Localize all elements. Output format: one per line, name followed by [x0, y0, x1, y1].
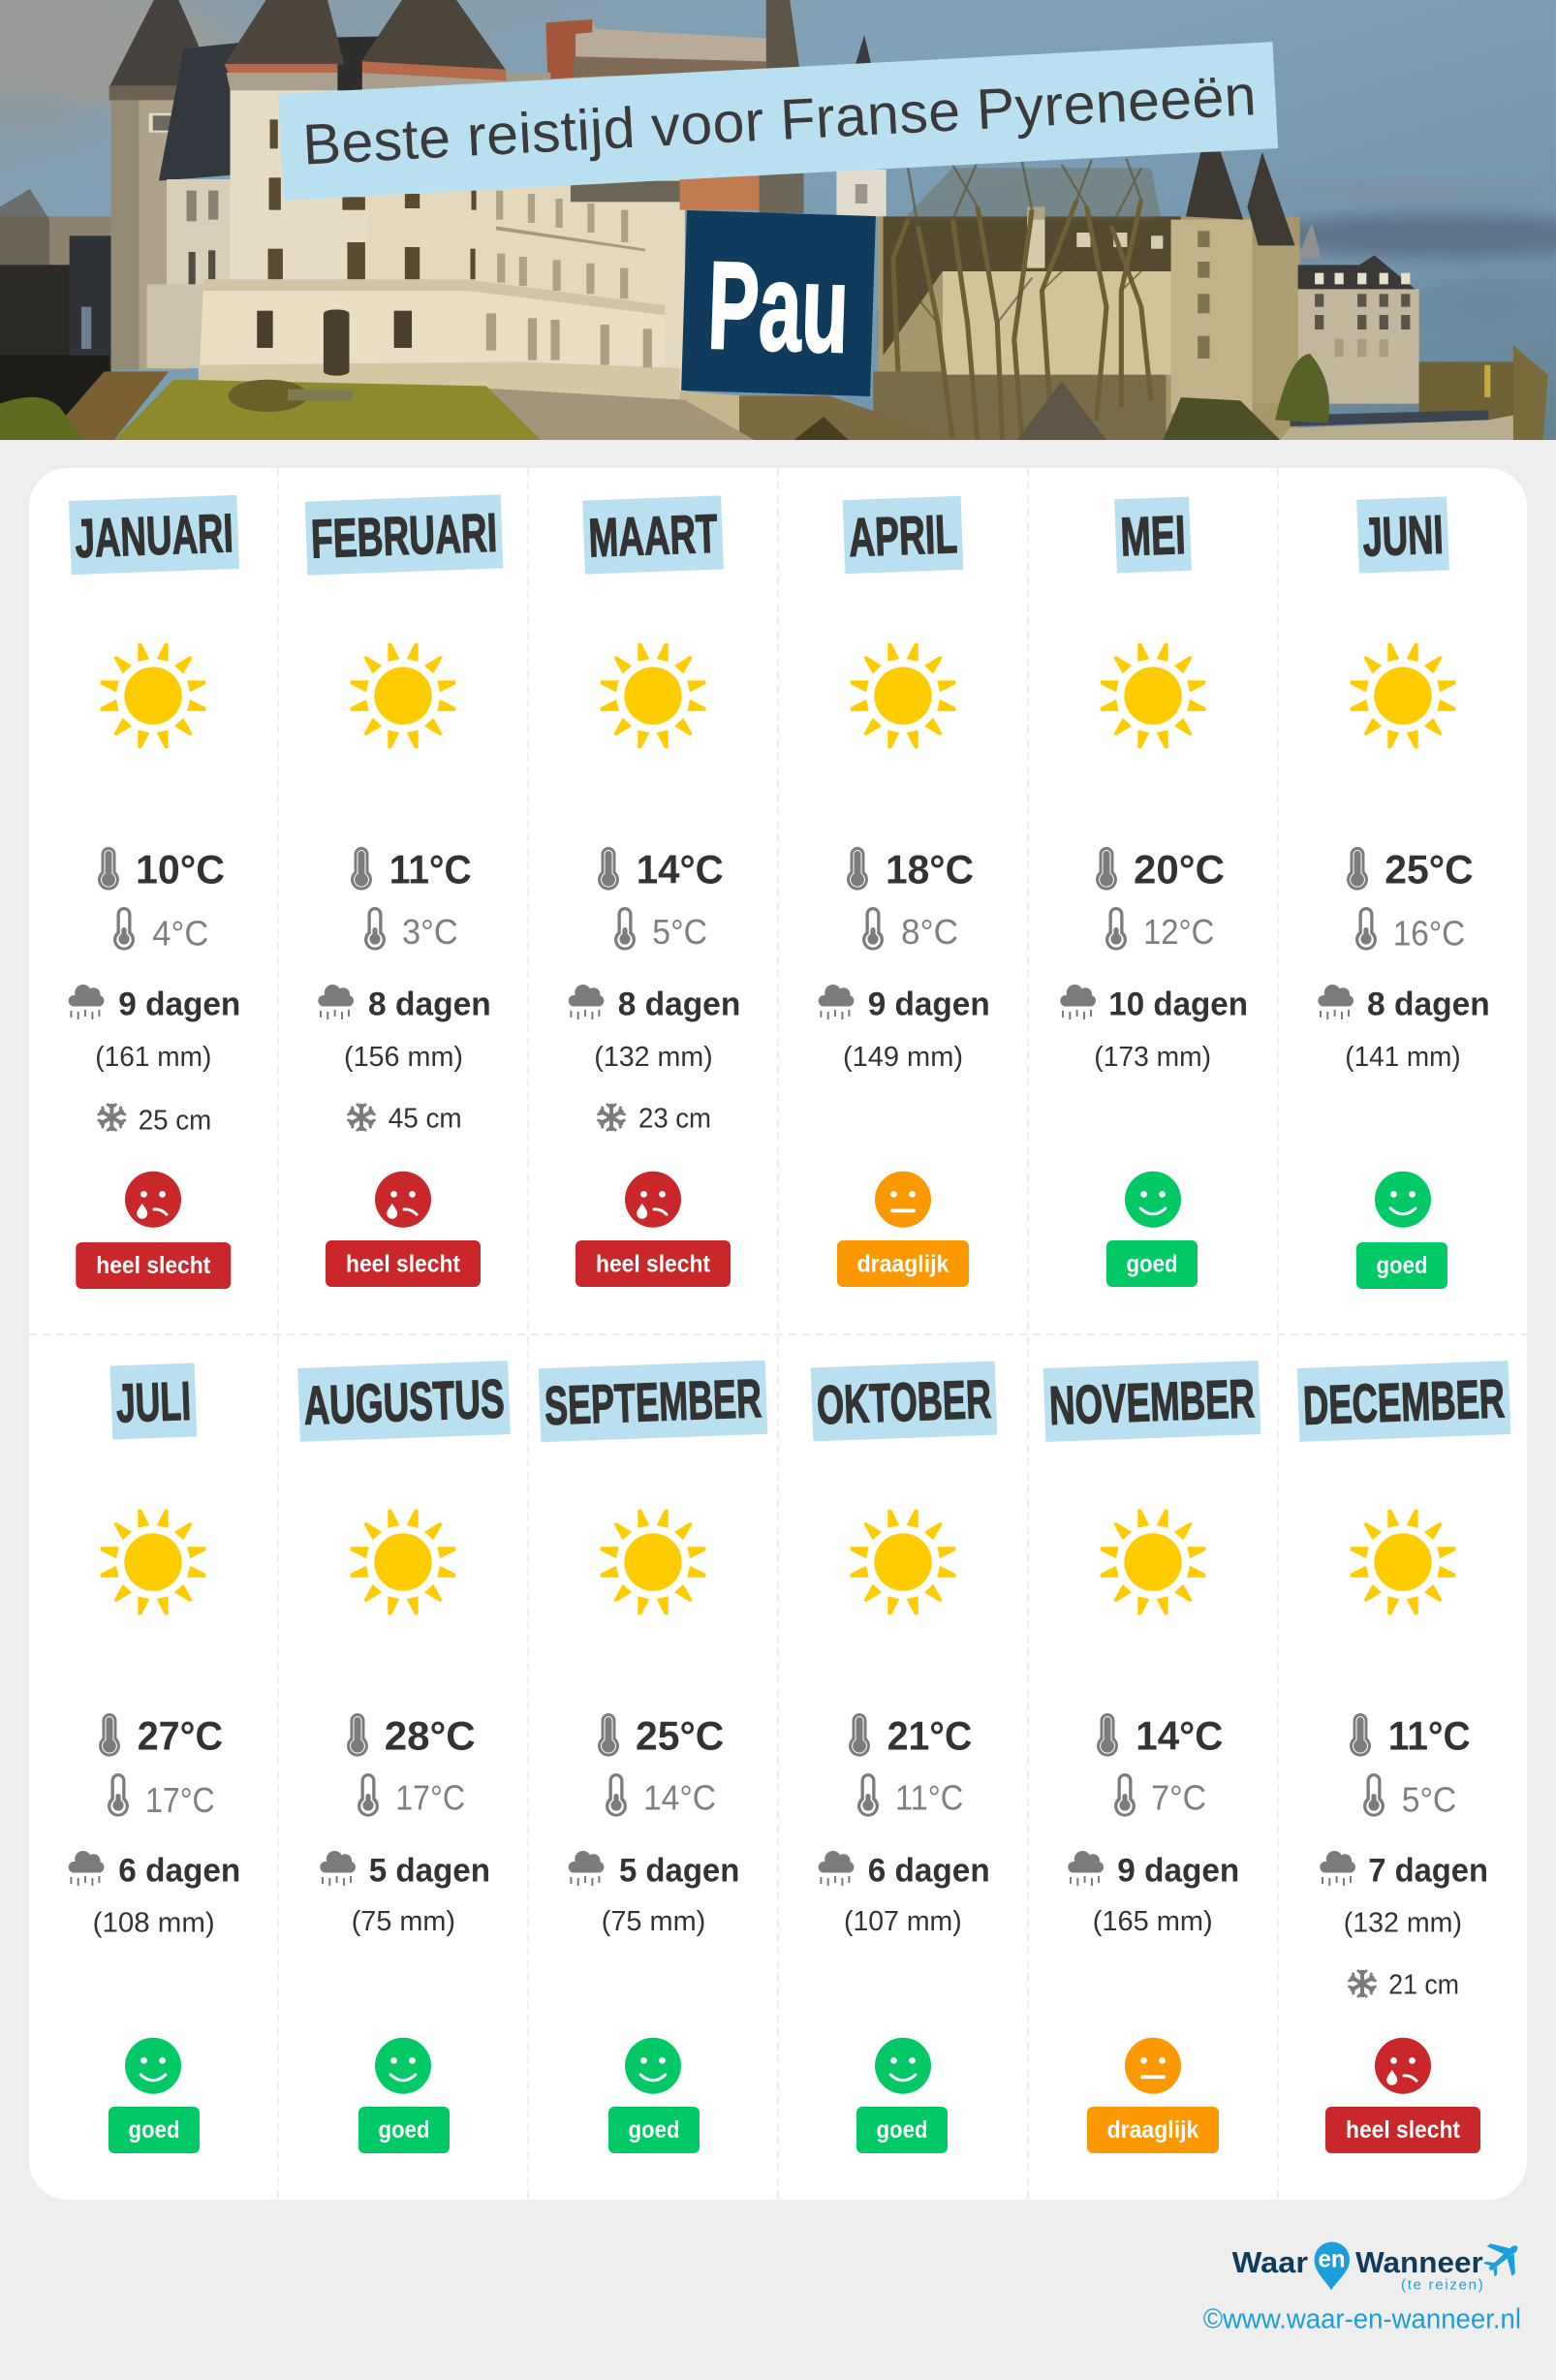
- rating badge: draaglijk: [1107, 2116, 1198, 2144]
- icon: sun: [1101, 643, 1205, 748]
- rain days: [569, 1851, 739, 1889]
- icon: sun: [351, 1510, 455, 1614]
- rating badge: heel slecht: [96, 1252, 211, 1279]
- tall towers: [231, 65, 337, 281]
- low temperature: 5°C: [1402, 1780, 1456, 1820]
- low temperature: 14°C: [643, 1778, 716, 1818]
- logo: Waar en Wanneer: [1232, 2232, 1530, 2294]
- rating badge: [1106, 1240, 1198, 1287]
- logo word: Wanneer: Wanneer: [1355, 2245, 1483, 2279]
- month label: JANUARI: [74, 502, 234, 569]
- month label: AUGUSTUS: [302, 1367, 506, 1436]
- high temperature: 18°C: [886, 847, 974, 892]
- high temperature: 25°C: [1385, 847, 1474, 892]
- rating badge: heel slecht: [1346, 2116, 1461, 2144]
- snowfall: [597, 1104, 711, 1135]
- month label: [297, 1361, 511, 1442]
- rain days: [1318, 985, 1490, 1022]
- month label: JUNI: [1361, 504, 1445, 567]
- rating badge: goed: [876, 2116, 928, 2144]
- high temperature: 27°C: [138, 1713, 223, 1759]
- icon: sad face: [1375, 2038, 1431, 2094]
- low temperature: [108, 1773, 215, 1820]
- rating badge: [326, 1240, 481, 1287]
- rain days: [1068, 1851, 1239, 1889]
- rain days: [1320, 1851, 1488, 1889]
- high temperature: [351, 847, 472, 892]
- high temperature: 21°C: [887, 1713, 972, 1759]
- high temperature: 14°C: [1136, 1713, 1223, 1759]
- rating badge: [1356, 1242, 1447, 1289]
- rating badge: [837, 1240, 969, 1287]
- rain days: [69, 1851, 240, 1889]
- rain days: 9 dagen: [118, 986, 240, 1022]
- high temperature: 11°C: [389, 847, 472, 892]
- low temperature: 17°C: [395, 1778, 465, 1818]
- rain days: 9 dagen: [868, 986, 990, 1022]
- rainfall: (156 mm): [344, 1042, 463, 1073]
- low temperature: 16°C: [1393, 914, 1465, 954]
- panel: mei: [1060, 497, 1248, 1287]
- icon: happy face: [1375, 1172, 1431, 1228]
- rating badge: heel slecht: [596, 1250, 711, 1277]
- rating badge: heel slecht: [346, 1250, 461, 1277]
- low temperature: [1363, 1773, 1456, 1820]
- low temperature: [1105, 907, 1214, 952]
- icon: map pin: [1314, 2241, 1350, 2290]
- month label: SEPTEMBER: [544, 1367, 762, 1436]
- rating badge: [1087, 2107, 1219, 2153]
- rating badge: goed: [1126, 1250, 1178, 1277]
- photo: Château de Pau: [0, 0, 1556, 440]
- icon: sun: [1101, 1510, 1205, 1614]
- rating badge: [109, 2107, 200, 2153]
- high temperature: 28°C: [385, 1713, 476, 1759]
- low temperature: [606, 1773, 716, 1818]
- high temperature: [1347, 847, 1474, 892]
- rainfall: (132 mm): [594, 1042, 713, 1073]
- left round tower: [111, 87, 189, 370]
- high temperature: 11°C: [1388, 1713, 1471, 1759]
- rain days: [569, 985, 740, 1022]
- snowfall: [98, 1104, 211, 1136]
- month label: MEI: [1119, 504, 1187, 567]
- snowfall: 23 cm: [638, 1104, 711, 1135]
- snowfall: [1348, 1970, 1459, 2001]
- low temperature: [862, 907, 958, 952]
- snowfall: 25 cm: [139, 1105, 211, 1136]
- high temperature: [598, 1713, 724, 1759]
- low temperature: [1114, 1773, 1206, 1818]
- month label: OKTOBER: [816, 1368, 992, 1435]
- rating badge: [358, 2107, 450, 2153]
- high temperature: 10°C: [136, 847, 225, 892]
- month label: [1356, 496, 1449, 574]
- month label: [843, 496, 963, 574]
- rain days: 8 dagen: [1367, 986, 1490, 1022]
- rainfall: (173 mm): [1094, 1042, 1211, 1073]
- rating badge: [608, 2107, 700, 2153]
- rainfall: (108 mm): [93, 1908, 215, 1939]
- rating badge: [576, 1240, 731, 1287]
- city name: Pau: [706, 236, 851, 379]
- high temperature: [99, 1713, 223, 1759]
- low temperature: 8°C: [901, 912, 958, 952]
- icon: sad face: [125, 1172, 181, 1228]
- panel: oktober: [811, 1362, 997, 2153]
- rainfall: (149 mm): [843, 1042, 963, 1073]
- month label: [305, 494, 503, 576]
- panel: juli: [69, 1362, 240, 2153]
- low temperature: 3°C: [402, 912, 458, 952]
- high temperature: 25°C: [636, 1713, 724, 1759]
- panel: maart: [569, 495, 740, 1287]
- panel: januari: [69, 495, 240, 1289]
- icon: sun: [101, 1510, 205, 1614]
- high temperature: [598, 847, 724, 892]
- left houses: [0, 216, 111, 271]
- rainfall: (107 mm): [844, 1906, 962, 1937]
- rating badge: [1325, 2107, 1480, 2153]
- rain days: [320, 1851, 490, 1889]
- hill, stairs, trees: [1163, 397, 1280, 440]
- icon: sad face: [375, 1172, 431, 1228]
- low temperature: 7°C: [1151, 1778, 1206, 1818]
- logo word: en: en: [1318, 2245, 1345, 2272]
- low temperature: 5°C: [652, 912, 707, 952]
- panel: juni: [1318, 496, 1490, 1289]
- month label: MAART: [587, 503, 719, 568]
- rain days: 8 dagen: [368, 986, 491, 1022]
- rain days: 7 dagen: [1368, 1852, 1488, 1889]
- distant trees and far wall: [1419, 361, 1528, 423]
- rain days: 5 dagen: [619, 1852, 739, 1889]
- snowfall: 45 cm: [389, 1104, 462, 1135]
- month label: [110, 1362, 197, 1440]
- icon: happy face: [125, 2038, 181, 2094]
- panel: months table: [29, 468, 1527, 2200]
- icon: happy face: [1125, 1172, 1181, 1228]
- low temperature: 11°C: [895, 1778, 963, 1818]
- month label: FEBRUARI: [310, 502, 498, 569]
- icon: sun: [1351, 643, 1455, 748]
- rating badge: goed: [128, 2116, 180, 2144]
- rating badge: goed: [628, 2116, 680, 2144]
- rain days: [318, 985, 491, 1022]
- logo tagline: (te reizen): [1401, 2277, 1483, 2294]
- month label: [582, 495, 724, 575]
- rain days: 5 dagen: [369, 1852, 490, 1889]
- month label: NOVEMBER: [1048, 1367, 1256, 1436]
- logo word: Waar: Waar: [1232, 2245, 1308, 2279]
- low temperature: [857, 1773, 963, 1818]
- high temperature: 20°C: [1134, 847, 1225, 892]
- panel: februari: [305, 494, 503, 1287]
- icon: sun: [601, 643, 705, 748]
- low temperature: [1355, 907, 1465, 954]
- back crenellated tower and spires: [766, 0, 800, 71]
- low temperature: [358, 1773, 465, 1818]
- rating badge: goed: [1376, 1252, 1428, 1279]
- rain days: [819, 1851, 990, 1889]
- main facade windows: [268, 119, 477, 279]
- panel: augustus: [297, 1361, 511, 2153]
- icon: happy face: [625, 2038, 681, 2094]
- rainfall: (75 mm): [352, 1906, 455, 1937]
- panel: november: [1043, 1361, 1260, 2153]
- website url: ©www.waar-en-wanneer.nl: [1203, 2303, 1521, 2334]
- high temperature: [1097, 1713, 1223, 1759]
- month label: [69, 495, 239, 575]
- month label: JULI: [115, 1370, 192, 1433]
- rain days: 6 dagen: [118, 1852, 240, 1889]
- low temperature: [113, 907, 208, 954]
- low temperature: 17°C: [145, 1780, 215, 1820]
- rainfall: (132 mm): [1344, 1908, 1462, 1939]
- icon: happy face: [375, 2038, 431, 2094]
- high temperature: 14°C: [637, 847, 724, 892]
- rating badge: [76, 1242, 231, 1289]
- month label: [539, 1361, 767, 1442]
- rainfall: (165 mm): [1093, 1906, 1213, 1937]
- icon: neutral face: [875, 1172, 931, 1228]
- rating badge: draaglijk: [857, 1250, 949, 1277]
- rating badge: goed: [378, 2116, 430, 2144]
- high temperature: [847, 847, 974, 892]
- low temperature: 4°C: [152, 914, 208, 954]
- panel: september: [539, 1361, 767, 2153]
- rain days: 9 dagen: [1117, 1852, 1239, 1889]
- high temperature: [849, 1713, 972, 1759]
- icon: airplane: [1477, 2232, 1530, 2285]
- facade behind title: [231, 90, 685, 400]
- rain days: 10 dagen: [1108, 986, 1248, 1022]
- bare trees: [903, 168, 1161, 220]
- rain days: [69, 985, 240, 1022]
- rainfall: (161 mm): [95, 1042, 211, 1073]
- rainfall: (75 mm): [602, 1906, 705, 1937]
- icon: sun: [351, 643, 455, 748]
- title banner: [278, 42, 1278, 201]
- rain days: [819, 985, 990, 1022]
- icon: happy face: [875, 2038, 931, 2094]
- title text: Beste reistijd voor Franse Pyreneeën: [301, 63, 1258, 177]
- icon: sun: [101, 643, 205, 748]
- icon: sun: [851, 1510, 955, 1614]
- icon: neutral face: [1125, 2038, 1181, 2094]
- right buildings: [878, 216, 1300, 440]
- panel: december: [1297, 1361, 1510, 2153]
- high temperature: [1350, 1713, 1471, 1759]
- icon: sun: [1351, 1510, 1455, 1614]
- terrace: [199, 279, 665, 400]
- icon: sun: [601, 1510, 705, 1614]
- snowfall: 21 cm: [1388, 1970, 1459, 2001]
- icon: sad face: [625, 1172, 681, 1228]
- month label: APRIL: [848, 503, 958, 568]
- month label: [1043, 1361, 1260, 1442]
- rain days: 6 dagen: [868, 1852, 990, 1889]
- low temperature: [614, 907, 707, 952]
- rating badge: [856, 2107, 948, 2153]
- month label: [811, 1362, 997, 1441]
- dark wing roof: [159, 43, 240, 181]
- month label: [1114, 497, 1192, 573]
- low temperature: 12°C: [1143, 912, 1214, 952]
- city banner: Pau: [681, 210, 876, 396]
- rain days: 8 dagen: [618, 986, 740, 1022]
- low temperature: [364, 907, 458, 952]
- snowfall: [347, 1104, 462, 1135]
- icon: sun: [851, 643, 955, 748]
- rainfall: (141 mm): [1345, 1042, 1461, 1073]
- high temperature: [98, 847, 225, 892]
- panel: april: [819, 496, 990, 1287]
